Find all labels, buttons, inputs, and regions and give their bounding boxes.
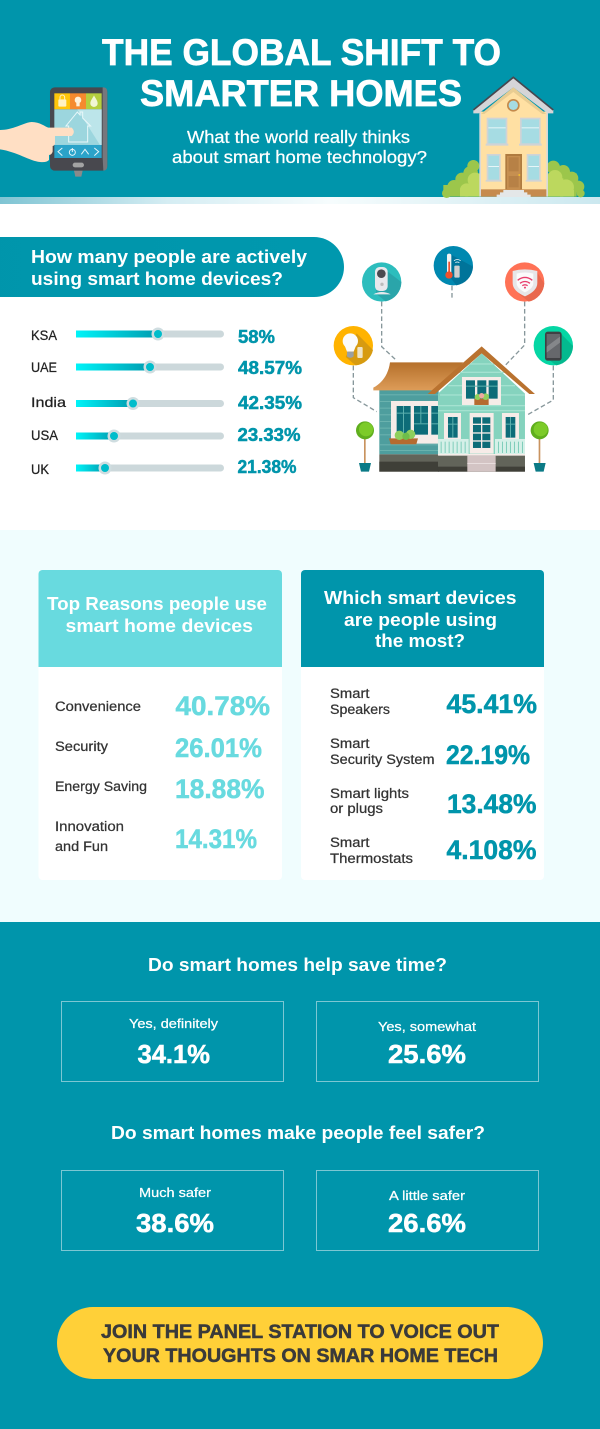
heading: most used devices: the most? [375, 630, 465, 651]
subtitle: What the world really thinks [187, 127, 410, 147]
panel: active users heading pill: using smart home devices? [31, 268, 283, 289]
subtitle: about smart home technology? [172, 147, 427, 167]
left wing with roof [373, 362, 463, 472]
device labels: Security System [330, 752, 434, 767]
stat box: yes, somewhat: Yes, somewhat [378, 1019, 476, 1034]
section: light background [0, 530, 600, 922]
stat box: much safer: Much safer [139, 1185, 212, 1200]
stat box: yes, definitely: 34.1% [138, 1039, 210, 1069]
device values: 22.19% [446, 740, 530, 770]
panel: most used devices [301, 570, 544, 880]
row: UAE: UAE [31, 359, 57, 375]
title [102, 32, 501, 114]
stat box: much safer: 38.6% [136, 1208, 214, 1238]
row: UAE: 48.57% [238, 358, 302, 378]
reasons values [175, 691, 270, 854]
reasons values: 26.01% [175, 733, 262, 763]
call to action: JOIN THE PANEL STATION TO VOICE OUT [101, 1321, 499, 1343]
icon: yellow house with bushes [442, 77, 585, 198]
device labels [330, 686, 434, 866]
heading: top reasons [47, 593, 267, 636]
row: UAE [31, 358, 302, 378]
row: UK: 21.38% [238, 457, 296, 477]
call to action [57, 1307, 543, 1379]
stat box: yes, definitely: Yes, definitely [129, 1016, 219, 1031]
heading: top reasons: smart home devices [66, 615, 253, 636]
stat box: yes, somewhat: 25.6% [388, 1039, 466, 1069]
panel: top reasons [38, 570, 282, 880]
right topiary plant [531, 421, 549, 472]
panel: active users heading pill: How many people are actively [31, 246, 308, 267]
icon: camera [362, 262, 401, 302]
heading: top reasons: Top Reasons people use [47, 593, 267, 614]
heading: most used devices: are people using [344, 609, 497, 630]
icon: wifi shield [505, 262, 544, 302]
device values [446, 689, 537, 865]
device labels: Smart [330, 835, 370, 850]
row: KSA: KSA [31, 327, 58, 343]
header gradient strip [0, 197, 600, 204]
row: UK [31, 457, 296, 477]
row: KSA [31, 327, 275, 347]
heading: feel safer: Do smart homes make people feel safer? [111, 1122, 485, 1143]
icon: smart bulb [334, 326, 373, 365]
section: header background [0, 0, 600, 197]
stat box: a little safer [316, 1170, 538, 1250]
reasons values: 18.88% [175, 774, 264, 804]
device labels: Smart [330, 686, 370, 701]
stat box: much safer [62, 1170, 284, 1250]
reasons labels [55, 699, 147, 854]
device values: 13.48% [447, 789, 536, 819]
reasons labels: Security [55, 739, 108, 754]
left topiary plant [356, 421, 374, 472]
icon: thermometer [434, 246, 473, 285]
device labels: or plugs [330, 801, 383, 816]
right gable with porch [428, 346, 535, 472]
row: India [31, 393, 302, 413]
row: KSA: 58% [238, 327, 275, 347]
reasons labels: Innovation [55, 819, 124, 834]
heading: save time: Do smart homes help save time? [148, 954, 447, 975]
device labels: Thermostats [330, 851, 413, 866]
stat box: yes, definitely [62, 1002, 284, 1082]
section: teal background [0, 922, 600, 1429]
row: India: India [31, 394, 66, 410]
row: USA: 23.33% [238, 425, 300, 445]
device values: 4.108% [446, 835, 536, 865]
device labels: Smart lights [330, 786, 409, 801]
illustration: smart house with device icons [334, 246, 573, 472]
subtitle [172, 127, 427, 167]
panel: active users heading pill [0, 237, 344, 297]
device labels: Smart [330, 736, 370, 751]
reasons labels: Convenience [55, 699, 141, 714]
icon: smartphone [534, 326, 573, 365]
stat box: yes, somewhat [316, 1002, 538, 1082]
row: USA: USA [31, 427, 59, 443]
title: THE GLOBAL SHIFT TO [102, 32, 501, 73]
chart: active users by country [31, 327, 302, 477]
reasons labels: Energy Saving [55, 779, 147, 794]
reasons values: 14.31% [175, 824, 257, 854]
row: USA [31, 425, 300, 445]
icon: tablet with hand [0, 87, 107, 177]
reasons labels: and Fun [55, 839, 108, 854]
heading: most used devices [324, 587, 516, 651]
device values: 45.41% [446, 689, 537, 719]
call to action: YOUR THOUGHTS ON SMAR HOME TECH [103, 1345, 498, 1367]
stat box: a little safer: 26.6% [388, 1208, 466, 1238]
stat box: a little safer: A little safer [389, 1188, 466, 1203]
row: India: 42.35% [238, 393, 302, 413]
heading: most used devices: Which smart devices [324, 587, 516, 608]
device labels: Speakers [330, 702, 390, 717]
reasons values: 40.78% [176, 691, 270, 721]
title: SMARTER HOMES [140, 73, 462, 114]
row: UK: UK [31, 461, 50, 477]
